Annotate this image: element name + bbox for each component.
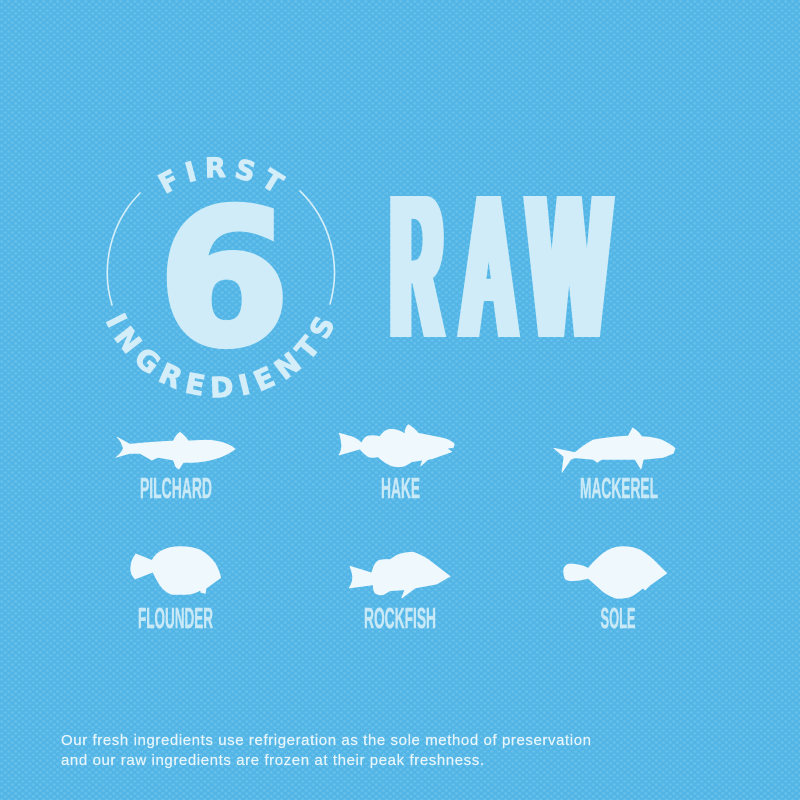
fish item: pilchard bbox=[116, 432, 235, 505]
heading: RAW: W bbox=[528, 153, 610, 381]
icon: sole bbox=[564, 547, 667, 598]
icon: flounder bbox=[131, 547, 221, 594]
fish item: rockfish bbox=[349, 552, 450, 635]
fish item: flounder bbox=[131, 547, 221, 635]
icon: mackerel bbox=[554, 428, 675, 472]
footnote text: and our raw ingredients are frozen at their peak freshness. bbox=[61, 752, 484, 769]
heading: RAW: R bbox=[391, 151, 442, 381]
heading: RAW: A bbox=[460, 152, 517, 381]
fish item: hake: HAKE bbox=[381, 473, 420, 505]
fish item: flounder: FLOUNDER bbox=[138, 603, 213, 635]
fish item: sole bbox=[564, 547, 667, 635]
fish item: pilchard: PILCHARD bbox=[140, 473, 212, 505]
footnote text: Our fresh ingredients use refrigeration as the sole method of preservation bbox=[61, 732, 591, 749]
badge word: FIRST: FIRST bbox=[157, 156, 286, 194]
badge: first 6 ingredients bbox=[106, 156, 336, 398]
icon: rockfish bbox=[349, 552, 450, 598]
fish item: mackerel: MACKEREL bbox=[580, 473, 658, 505]
fish item: rockfish: ROCKFISH bbox=[364, 603, 436, 635]
footnote text bbox=[61, 732, 591, 769]
heading: RAW bbox=[391, 151, 610, 381]
fish item: sole: SOLE bbox=[600, 603, 636, 635]
badge ring arcs bbox=[107, 191, 334, 305]
icon: hake bbox=[339, 425, 454, 467]
fish item: mackerel bbox=[554, 428, 675, 505]
icon: pilchard bbox=[116, 432, 235, 469]
badge numeral: 6: 6 bbox=[159, 171, 289, 388]
fish item: hake bbox=[339, 425, 454, 505]
badge word: INGREDIENTS: INGREDIENTS bbox=[106, 312, 333, 398]
